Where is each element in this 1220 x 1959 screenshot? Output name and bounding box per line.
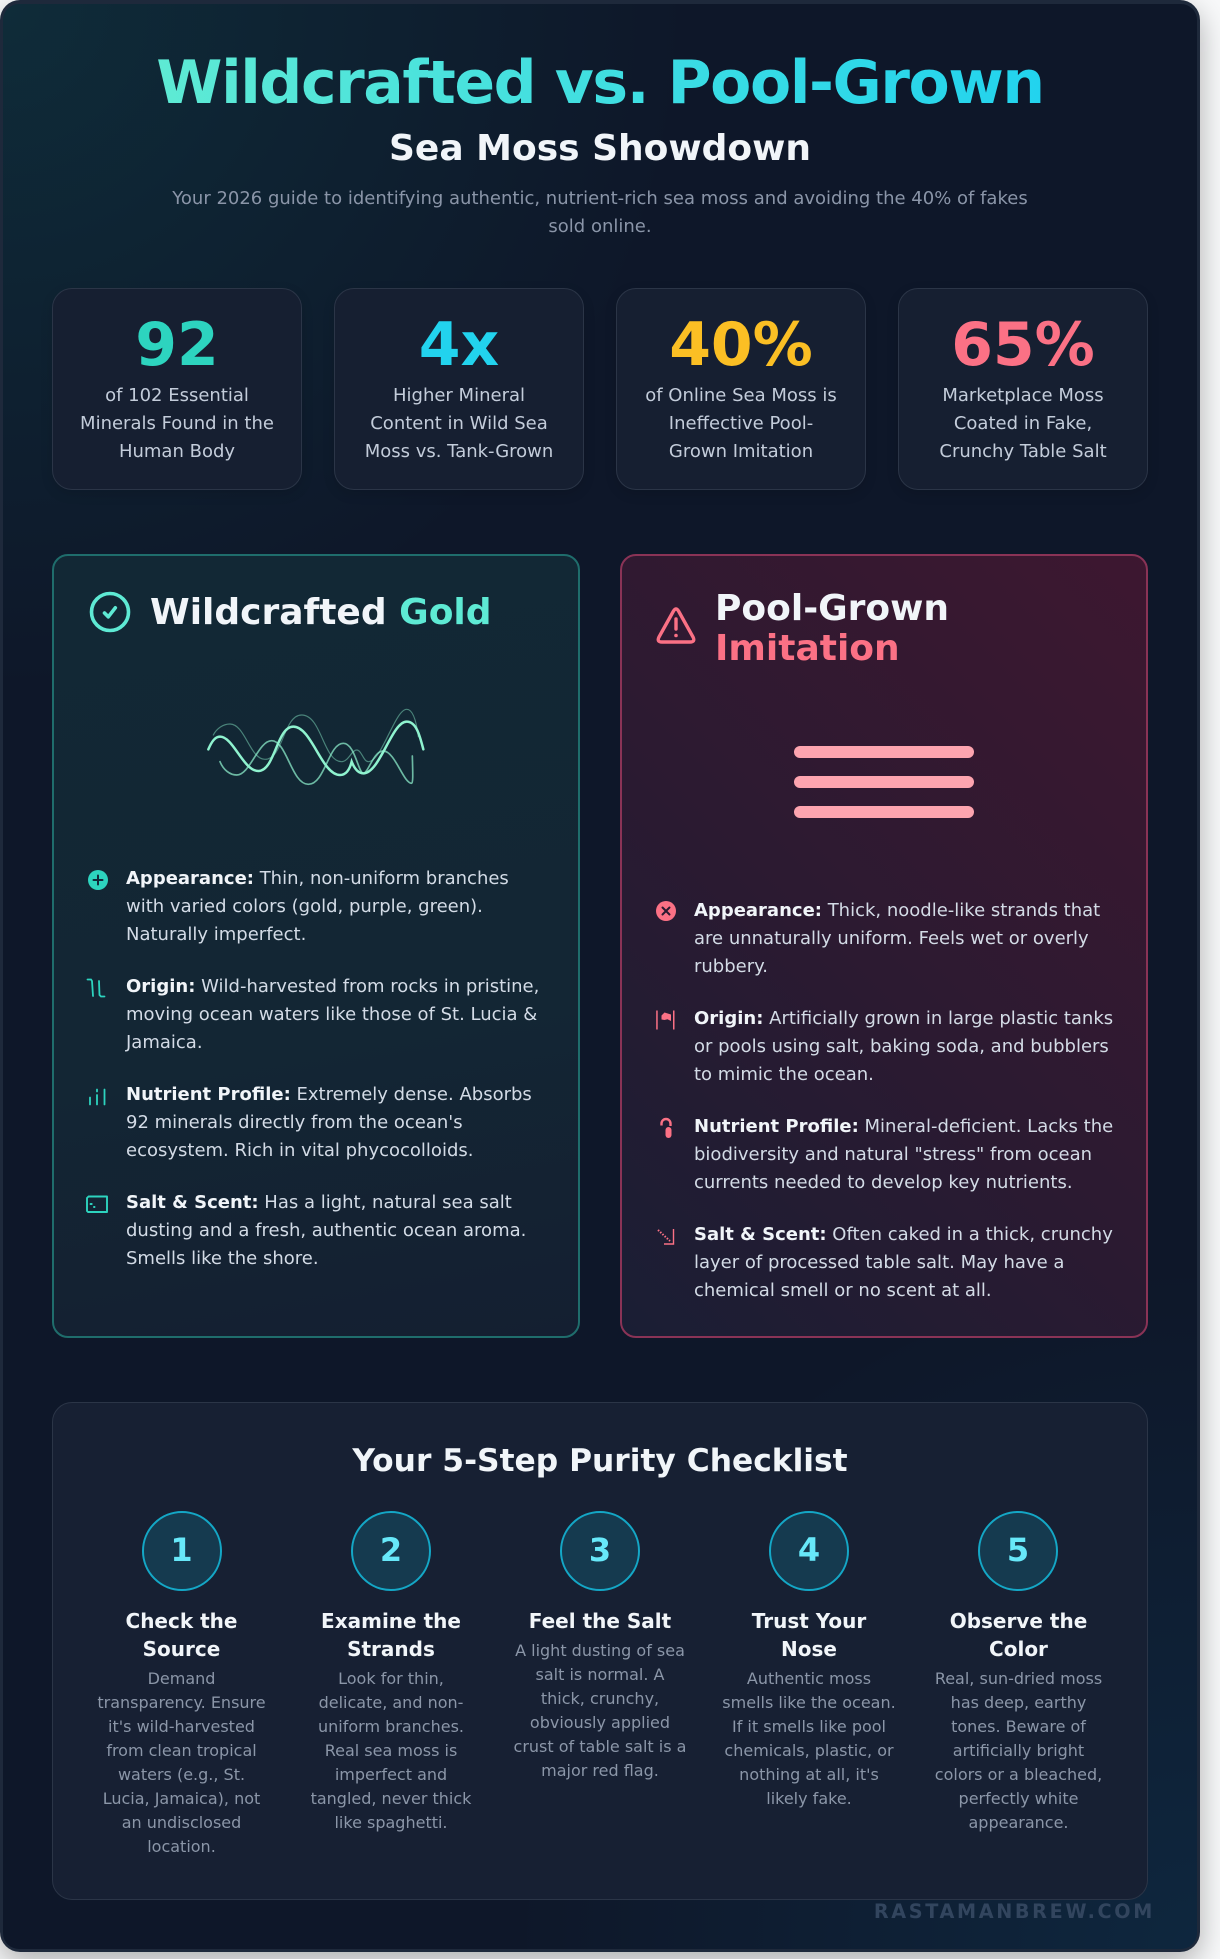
- infographic frame: it's wild-harvested: [108, 1717, 255, 1736]
- icon: nutrient bars: [89, 1088, 106, 1106]
- stat card: 65% table salt: Marketplace Moss: [942, 385, 1104, 406]
- infographic frame: waters (e.g., St.: [118, 1765, 245, 1784]
- stat card: 40% fakes: [616, 288, 866, 490]
- infographic frame: artificially bright: [953, 1741, 1084, 1760]
- stat card: 40% fakes: 40%: [669, 310, 813, 380]
- step 5: [935, 1511, 1102, 1832]
- illustration: wild moss strands: [207, 708, 425, 786]
- infographic frame: Color: [989, 1637, 1048, 1661]
- icon: check circle: [90, 592, 130, 632]
- icon: salt card: [86, 1196, 108, 1213]
- infographic frame: obviously applied: [530, 1713, 670, 1732]
- infographic frame: imperfect and: [335, 1765, 447, 1784]
- infographic frame: salt is normal. A: [536, 1665, 664, 1684]
- text: wild origin: Origin: Wild-harvested from rocks in pristine,: [126, 976, 539, 996]
- stat card: 92 minerals: 92: [135, 310, 219, 380]
- icon: appearance plus: [88, 870, 108, 890]
- infographic frame: perfectly white: [959, 1789, 1078, 1808]
- text: wild appearance: with varied colors (gold, purple, green).: [126, 896, 483, 917]
- illustration: uniform noodle strands: [794, 746, 974, 818]
- stat card: 4x mineral content: [334, 288, 584, 490]
- stat card: 4x mineral content: 4x: [419, 310, 499, 380]
- text: pool salt and scent: [694, 1224, 1113, 1301]
- text: pool salt and scent: chemical smell or no scent at all.: [694, 1280, 992, 1301]
- infographic frame: crust of table salt is a: [514, 1737, 686, 1756]
- text: pool appearance: are unnaturally uniform. Feels wet or overly: [694, 928, 1089, 949]
- infographic frame: colors or a bleached,: [935, 1765, 1102, 1784]
- infographic frame: thick, crunchy,: [541, 1689, 659, 1708]
- infographic frame: 2: [380, 1531, 402, 1569]
- text: wild origin: [125, 976, 539, 1053]
- infographic frame: Source: [143, 1637, 220, 1661]
- infographic frame: 1: [170, 1531, 193, 1569]
- text: wild origin: moving ocean waters like those of St. Lucia &: [126, 1004, 537, 1025]
- text: wild salt and scent: Salt & Scent: Has a light, natural sea salt: [126, 1192, 512, 1212]
- text: pool nutrient profile: Nutrient Profile: Mineral-deficient. Lacks the: [694, 1116, 1113, 1136]
- text: pool appearance: Appearance: Thick, noodle-like strands that: [694, 900, 1100, 920]
- text: pool salt and scent: Salt & Scent: Often caked in a thick, crunchy: [694, 1224, 1113, 1244]
- stat card: 65% table salt: Crunchy Table Salt: [939, 441, 1107, 462]
- stat card: 40% fakes: Grown Imitation: [669, 441, 813, 462]
- subtitle: Sea Moss Showdown: [389, 128, 811, 169]
- panel: purity checklist: [52, 1402, 1148, 1900]
- stat card: 4x mineral content: Moss vs. Tank-Grown: [365, 441, 553, 462]
- infographic frame: likely fake.: [766, 1789, 852, 1808]
- text: wild origin: Jamaica.: [126, 1032, 203, 1053]
- text: pool origin: Origin: Artificially grown in large plastic tanks: [694, 1008, 1113, 1028]
- stat card: 92 minerals: Human Body: [119, 441, 235, 462]
- text: wild nutrient profile: [126, 1084, 532, 1161]
- infographic frame: If it smells like pool: [732, 1717, 886, 1736]
- infographic frame: Look for thin,: [338, 1669, 444, 1688]
- panel heading: pool-grown imitation: [715, 588, 949, 669]
- infographic frame: Check the: [126, 1609, 237, 1633]
- infographic frame: Lucia, Jamaica), not: [103, 1789, 260, 1808]
- stat card: 4x mineral content: Content in Wild Sea: [370, 413, 548, 434]
- checklist heading: Your 5-Step Purity Checklist: [352, 1443, 848, 1479]
- panel: wildcrafted gold: [52, 554, 580, 1338]
- icon: nutrient pill: [660, 1118, 672, 1138]
- step 4: [722, 1511, 896, 1808]
- step 2: [311, 1511, 472, 1832]
- infographic frame: major red flag.: [541, 1761, 659, 1780]
- icon: salt crust: [657, 1229, 674, 1245]
- text: pool salt and scent: layer of processed table salt. May have a: [694, 1252, 1064, 1273]
- text: pool origin: to mimic the ocean.: [694, 1064, 874, 1085]
- infographic frame: Strands: [347, 1637, 435, 1661]
- panel heading: pool-grown imitation: Pool-Grown: [715, 588, 949, 629]
- infographic frame: like spaghetti.: [334, 1813, 448, 1832]
- text: pool origin: or pools using salt, baking soda, and bubblers: [694, 1036, 1109, 1057]
- text: wild appearance: Naturally imperfect.: [126, 924, 306, 945]
- intro text: Your 2026 guide to identifying authentic, nutrient-rich sea moss and avoiding the 40% of fakes: [172, 188, 1028, 208]
- intro text: [172, 188, 1028, 237]
- infographic frame: chemicals, plastic, or: [724, 1741, 894, 1760]
- infographic frame: from clean tropical: [106, 1741, 257, 1760]
- stat card: 40% fakes: Ineffective Pool-: [669, 413, 813, 434]
- stat card: 92 minerals: of 102 Essential: [105, 385, 249, 406]
- text: wild salt and scent: dusting and a fresh, authentic ocean aroma.: [126, 1220, 526, 1241]
- infographic frame: 3: [589, 1531, 611, 1569]
- title: Wildcrafted vs. Pool-Grown: [156, 48, 1044, 118]
- text: pool appearance: rubbery.: [694, 956, 768, 977]
- infographic frame: smells like the ocean.: [722, 1693, 896, 1712]
- infographic frame: uniform branches.: [318, 1717, 464, 1736]
- icon: appearance x: [656, 901, 676, 921]
- infographic frame: tones. Beware of: [951, 1717, 1086, 1736]
- step 3: [514, 1511, 686, 1780]
- icon: warning triangle: [656, 607, 696, 644]
- infographic frame: appearance.: [968, 1813, 1068, 1832]
- infographic frame: has deep, earthy: [951, 1693, 1086, 1712]
- step 1: [97, 1511, 266, 1856]
- stat card: 65% table salt: [898, 288, 1148, 490]
- stat card: 40% fakes: of Online Sea Moss is: [645, 385, 837, 406]
- infographic frame: an undisclosed: [122, 1813, 241, 1832]
- text: wild salt and scent: Smells like the shore.: [126, 1248, 319, 1269]
- panel: pool-grown imitation: [620, 554, 1148, 1338]
- stat card: 65% table salt: 65%: [951, 310, 1095, 380]
- infographic frame: nothing at all, it's: [739, 1765, 879, 1784]
- text: wild nutrient profile: 92 minerals directly from the ocean's: [126, 1112, 463, 1133]
- infographic frame: Real sea moss is: [325, 1741, 457, 1760]
- text: pool nutrient profile: [694, 1116, 1113, 1193]
- infographic frame: A light dusting of sea: [515, 1641, 685, 1660]
- panel heading: pool-grown imitation: Imitation: [715, 628, 900, 669]
- stat card: 92 minerals: [52, 288, 302, 490]
- infographic frame: transparency. Ensure: [97, 1693, 266, 1712]
- text: pool origin: [694, 1008, 1113, 1085]
- infographic frame: 4: [798, 1531, 820, 1569]
- text: wild salt and scent: [126, 1192, 526, 1269]
- infographic frame: Trust Your: [752, 1609, 866, 1633]
- infographic frame: Examine the: [321, 1609, 461, 1633]
- stat card: 65% table salt: Coated in Fake,: [954, 413, 1092, 434]
- watermark: RASTAMANBREW.COM: [874, 1900, 1155, 1923]
- icon: origin currents: [86, 978, 106, 998]
- infographic frame: Nose: [781, 1637, 837, 1661]
- text: pool nutrient profile: biodiversity and natural "stress" from ocean: [694, 1144, 1092, 1165]
- infographic frame: Real, sun-dried moss: [935, 1669, 1102, 1688]
- infographic frame: 5: [1007, 1531, 1029, 1569]
- text: wild appearance: [126, 868, 509, 945]
- text: wild nutrient profile: Nutrient Profile: Extremely dense. Absorbs: [126, 1084, 532, 1104]
- panel heading: wildcrafted gold: Wildcrafted Gold: [150, 592, 492, 632]
- infographic frame: Observe the: [950, 1609, 1087, 1633]
- icon: origin tank: [656, 1010, 674, 1030]
- stat card: 4x mineral content: Higher Mineral: [393, 385, 525, 406]
- text: pool appearance: [694, 900, 1100, 977]
- text: wild nutrient profile: ecosystem. Rich in vital phycocolloids.: [126, 1140, 473, 1161]
- infographic frame: location.: [147, 1837, 216, 1856]
- stat card: 92 minerals: Minerals Found in the: [80, 413, 274, 434]
- infographic frame: tangled, never thick: [311, 1789, 471, 1808]
- intro text: sold online.: [548, 216, 652, 237]
- infographic frame: Authentic moss: [747, 1669, 871, 1688]
- infographic frame: delicate, and non-: [319, 1693, 463, 1712]
- text: wild appearance: Appearance: Thin, non-uniform branches: [126, 868, 509, 888]
- infographic frame: Demand: [148, 1669, 215, 1688]
- infographic frame: Feel the Salt: [529, 1609, 671, 1633]
- text: pool nutrient profile: currents needed to develop key nutrients.: [694, 1172, 1073, 1193]
